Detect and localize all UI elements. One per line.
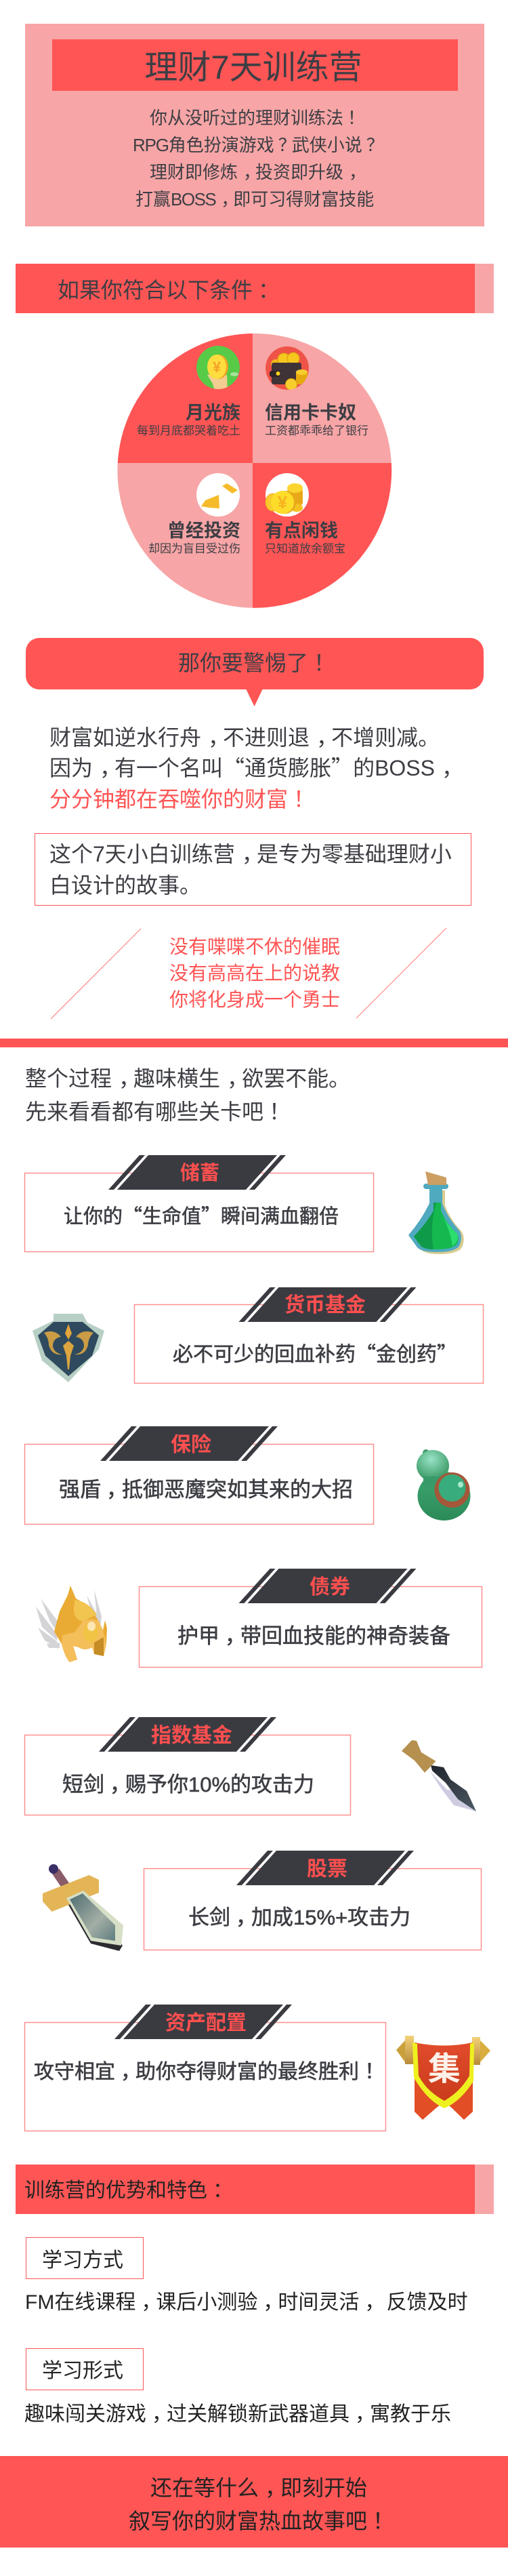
level card: money fund: 必不可少的回血补药“金创药” bbox=[173, 1337, 457, 1367]
level card: asset allocation bbox=[24, 2005, 490, 2131]
section heading: conditions bbox=[16, 264, 494, 313]
tag: money fund bbox=[238, 1287, 416, 1322]
tag: insurance: 保险 bbox=[171, 1434, 211, 1456]
icon: red banner bbox=[396, 2036, 490, 2120]
call to action: 还在等什么 ，即刻开始 bbox=[150, 2476, 367, 2500]
icon: hand holding coin: ¥ bbox=[213, 359, 221, 376]
icon: hand holding coin bbox=[196, 346, 240, 393]
text block: level intro: 先来看看都有哪些关卡吧！ bbox=[25, 1100, 291, 1124]
text block: intro copy: 理财即修炼 ，投资即升级 ， bbox=[150, 162, 366, 182]
level card: money fund bbox=[33, 1287, 484, 1383]
icon: shield bbox=[33, 1314, 104, 1382]
text block: inflation boss: 财富如逆水行舟 ，不进则退 ，不增则减。 bbox=[49, 725, 440, 750]
feature: learning form: 趣味闯关游戏 ，过关解锁新武器道具 ，寓教于乐 bbox=[24, 2403, 451, 2426]
label: credit card slave bbox=[265, 403, 368, 437]
feature: learning form: 学习形式 bbox=[42, 2360, 123, 2382]
label: past investor bbox=[148, 521, 240, 555]
label: moonlight clan bbox=[137, 403, 240, 437]
text block: intro copy: 打赢BOSS ，即可习得财富技能 bbox=[135, 189, 374, 209]
icon: green potion bbox=[408, 1171, 464, 1254]
section heading: strengths: 训练营的优势和特色 ： bbox=[24, 2179, 233, 2202]
label: moonlight clan: 每到月底都哭着吃土 bbox=[137, 424, 240, 437]
text block: intro copy: RPG角色扮演游戏？武侠小说？ bbox=[133, 135, 384, 155]
pie chart: four types bbox=[115, 331, 395, 612]
label: spare money bbox=[265, 521, 345, 555]
label: past investor: 却因为盲目受过伤 bbox=[148, 542, 240, 555]
text block: intro copy bbox=[133, 108, 384, 209]
slogan with slashes bbox=[51, 928, 446, 1019]
panel: camp description: 白设计的故事。 bbox=[49, 873, 201, 898]
text block: inflation boss: 分分钟都在吞噬你的财富！ bbox=[49, 787, 315, 811]
feature: learning method: 学习方式 bbox=[42, 2249, 123, 2272]
icon: flying bills bbox=[196, 473, 240, 517]
call to action: 叙写你的财富热血故事吧！ bbox=[129, 2509, 394, 2533]
tag: savings: 储蓄 bbox=[180, 1162, 219, 1184]
feature: learning form bbox=[24, 2348, 451, 2426]
text block: level intro bbox=[25, 1066, 350, 1124]
feature: learning method bbox=[25, 2237, 468, 2314]
label: credit card slave: 信用卡卡奴 bbox=[265, 403, 356, 423]
level card: bonds: 护甲 ，带回血技能的神奇装备 bbox=[177, 1624, 450, 1648]
callout: warning bubble bbox=[26, 638, 484, 706]
tag: stocks: 股票 bbox=[307, 1858, 347, 1880]
level card: savings: 让你的“生命值”瞬间满血翻倍 bbox=[64, 1201, 339, 1229]
panel: intro bbox=[25, 24, 484, 226]
icon: coin pile bbox=[266, 473, 309, 517]
title: 理财7天训练营 bbox=[144, 49, 362, 86]
level card: stocks bbox=[43, 1851, 481, 1951]
level card: stocks: 长剑 ，加成15%+攻击力 bbox=[188, 1906, 410, 1929]
icon: coin pile: ¥ bbox=[278, 492, 288, 512]
title bbox=[52, 39, 458, 91]
level card: asset allocation: 攻守相宜 ，助你夺得财富的最终胜利 ！ bbox=[34, 2061, 385, 2083]
label: spare money: 只知道放余额宝 bbox=[265, 542, 345, 555]
label: past investor: 曾经投资 bbox=[167, 521, 240, 541]
tag: bonds: 债券 bbox=[310, 1576, 350, 1598]
call to action bbox=[0, 2456, 508, 2548]
panel: camp description: 这个7天小白训练营 ，是专为零基础理财小 bbox=[49, 842, 452, 866]
panel: camp description bbox=[35, 834, 471, 906]
label: spare money: 有点闲钱 bbox=[265, 521, 338, 541]
icon: winged helmet bbox=[36, 1586, 107, 1662]
text block: inflation boss bbox=[49, 725, 463, 811]
tag: stocks bbox=[236, 1851, 414, 1885]
tag: money fund: 货币基金 bbox=[284, 1294, 366, 1316]
text block: intro copy: 你从没听过的理财训练法！ bbox=[150, 108, 365, 128]
level card: index fund: 短剑 ，赐予你10%的攻击力 bbox=[62, 1773, 314, 1796]
tag: index fund: 指数基金 bbox=[151, 1725, 232, 1747]
text block: level intro: 整个过程 ，趣味横生 ，欲罢不能。 bbox=[25, 1066, 350, 1091]
slogan with slashes: 你将化身成一个勇士 bbox=[169, 989, 340, 1010]
icon: red banner: 集 bbox=[428, 2051, 461, 2087]
feature: learning method: FM在线课程 ，课后小测验 ，时间灵活 ， 反馈及时 bbox=[25, 2291, 468, 2314]
tag: bonds bbox=[238, 1569, 416, 1603]
level card: index fund bbox=[24, 1717, 476, 1815]
label: credit card slave: 工资都乖乖给了银行 bbox=[265, 424, 368, 437]
icon: long sword bbox=[43, 1864, 123, 1951]
tag: asset allocation: 资产配置 bbox=[165, 2012, 247, 2034]
tag: index fund bbox=[99, 1717, 276, 1752]
section heading: conditions: 如果你符合以下条件： bbox=[58, 278, 280, 302]
tag: savings bbox=[108, 1155, 286, 1190]
label: moonlight clan: 月光族 bbox=[186, 403, 240, 423]
text block: inflation boss: 因为 ，有一个名叫“通货膨胀”的BOSS ， bbox=[49, 751, 463, 782]
level card: insurance bbox=[24, 1426, 470, 1524]
icon: dagger bbox=[402, 1740, 476, 1811]
level card: bonds bbox=[36, 1569, 482, 1668]
slogan with slashes: 没有喋喋不休的催眠 bbox=[169, 936, 340, 957]
level card: savings bbox=[24, 1155, 464, 1254]
level card: insurance: 强盾 ，抵御恶魔突如其来的大招 bbox=[59, 1478, 353, 1502]
tag: insurance bbox=[100, 1426, 278, 1461]
callout: warning bubble: 那你要警惕了！ bbox=[178, 651, 335, 675]
slogan with slashes: 没有高高在上的说教 bbox=[169, 963, 340, 984]
icon: wallet with coins bbox=[266, 346, 309, 390]
section heading: strengths bbox=[16, 2165, 494, 2214]
tag: asset allocation bbox=[114, 2005, 292, 2039]
icon: gourd bbox=[417, 1449, 470, 1521]
